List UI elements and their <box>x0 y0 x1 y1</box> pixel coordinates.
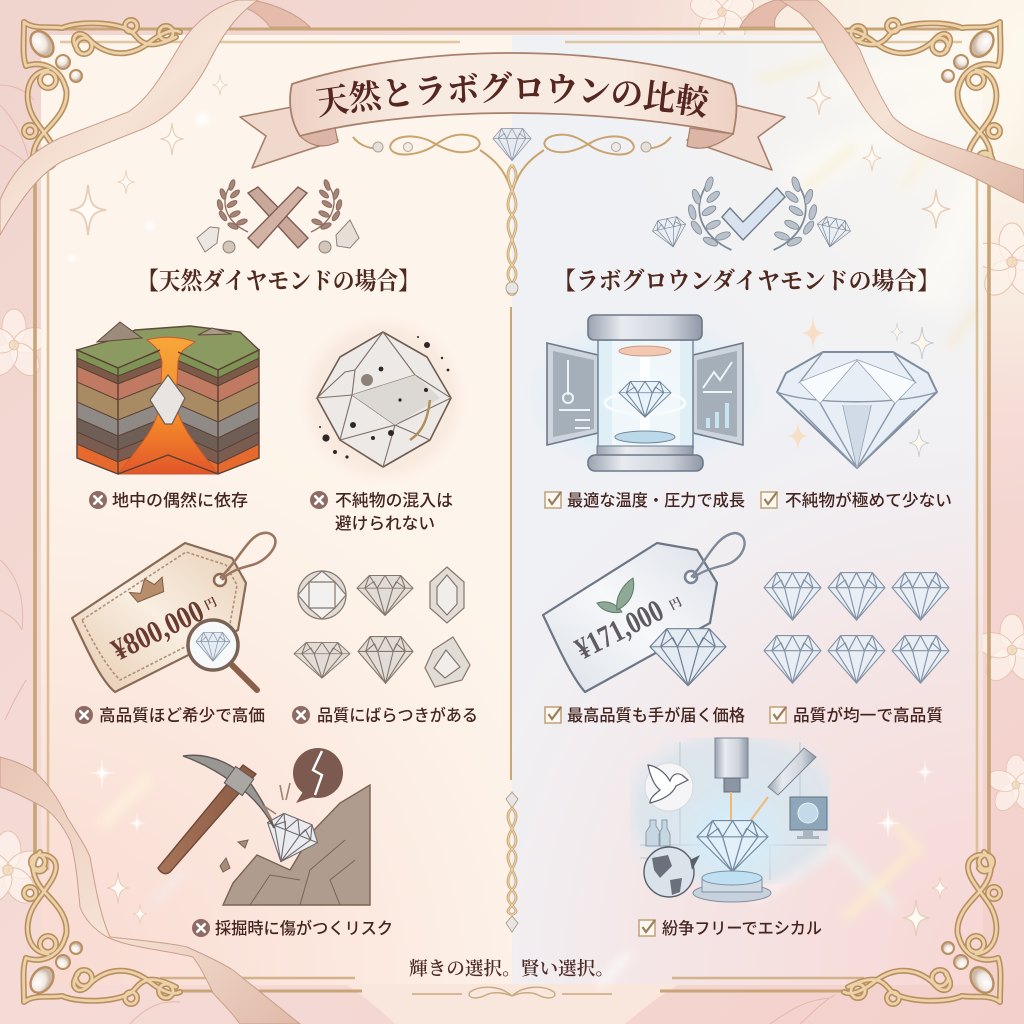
icon: earth cross-section with magma <box>75 321 260 475</box>
icon: price tag ¥171,000: 円 <box>667 595 684 613</box>
icon: varied quality gems <box>294 567 470 687</box>
caption: natural 2: 避けられない <box>335 514 435 533</box>
ribbon: top right <box>740 0 1024 203</box>
icon: impure rough diamond <box>295 312 471 488</box>
icon: CVD reactor with screens <box>520 310 770 480</box>
corner ornament: bottom left <box>24 852 180 1004</box>
caption: natural 5: 採掘時に傷がつくリスク <box>215 918 393 938</box>
caption: natural 2: 不純物の混入は <box>335 491 453 510</box>
icon: pure large diamond <box>777 316 937 468</box>
caption: natural 3: 高品質ほど希少で高価 <box>99 706 265 725</box>
corner ornament: top right <box>844 20 1000 172</box>
price: ¥800,000 <box>106 593 209 667</box>
sparkles <box>66 74 950 936</box>
icon: ethical lab scene <box>630 738 830 902</box>
footer flourish <box>412 987 612 998</box>
icon: six uniform diamonds <box>764 573 949 683</box>
caption: natural 4: 品質にばらつきがある <box>317 705 478 725</box>
ribbon: top left <box>0 0 310 235</box>
icon: pickaxe and rock <box>158 748 370 905</box>
caption: lab 3: 最高品質も手が届く価格 <box>567 705 745 725</box>
icon: price tag ¥800,000: 円 <box>202 595 219 613</box>
caption: lab 4: 品質が均一で高品質 <box>793 705 943 725</box>
heading: lab grown: 【ラボグロウンダイヤモンドの場合】 <box>553 268 940 295</box>
caption: lab 5: 紛争フリーでエシカル <box>662 919 822 938</box>
footer tagline: 輝きの選択。賢い選択。 <box>409 959 614 980</box>
icon: check with laurels <box>651 176 852 250</box>
price: ¥171,000 <box>569 592 669 666</box>
center divider <box>510 307 512 780</box>
icon: crossed planks with laurels <box>197 179 359 253</box>
ribbon: bottom left <box>0 757 300 1024</box>
caption: lab 2: 不純物が極めて少ない <box>785 490 952 510</box>
title text: 天然とラボグロウンの比較 <box>316 71 709 118</box>
heading: natural: 【天然ダイヤモンドの場合】 <box>137 268 420 295</box>
center vertical braid top <box>506 165 518 295</box>
center vertical braid bottom <box>506 792 518 932</box>
center top ornament <box>353 128 671 190</box>
title banner <box>239 52 786 171</box>
corner ornament: bottom right <box>844 852 1000 1004</box>
icon: price tag ¥171,000 <box>543 533 745 692</box>
caption: lab 1: 最適な温度・圧力で成長 <box>567 491 745 510</box>
corner ornament: top left <box>24 20 180 172</box>
caption: natural 1: 地中の偶然に依存 <box>112 490 248 510</box>
caption: natural 2 <box>310 491 453 533</box>
icon: price tag ¥800,000 <box>72 533 275 692</box>
